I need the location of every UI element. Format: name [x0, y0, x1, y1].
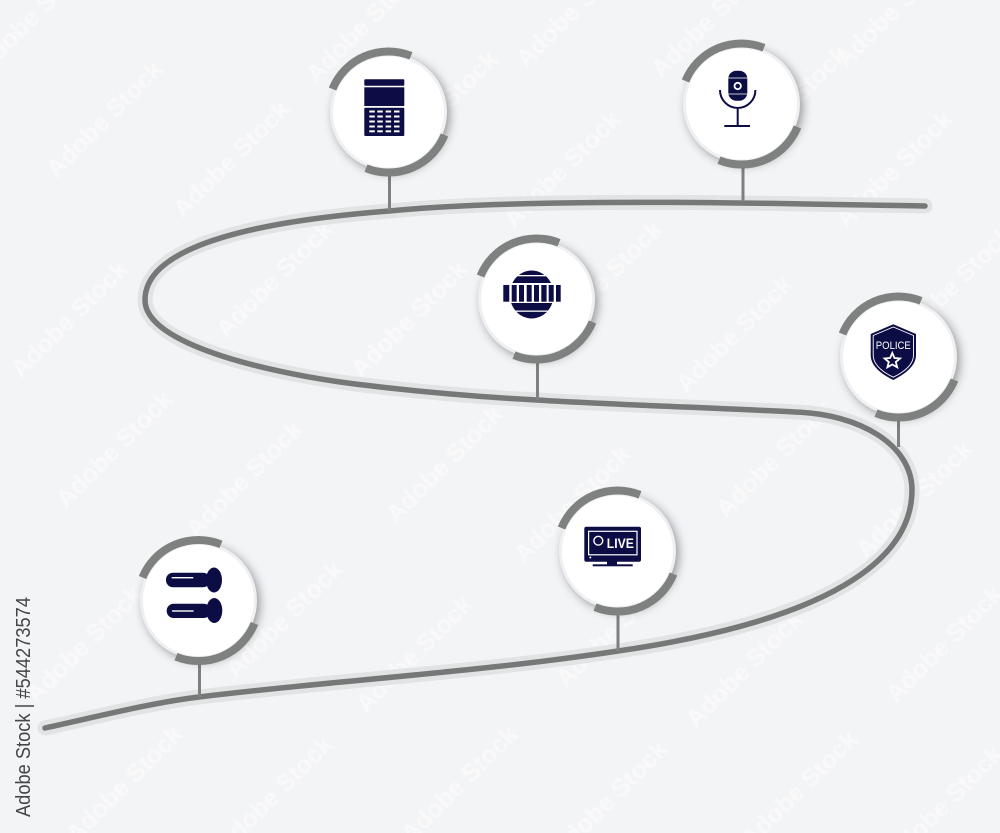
watermark pattern: Adobe Stock	[680, 605, 808, 733]
watermark pattern: Adobe Stock	[550, 565, 678, 693]
watermark pattern: Adobe Stock	[830, 105, 958, 233]
watermark pattern: Adobe Stock	[50, 385, 178, 513]
watermark pattern: Adobe Stock	[20, 580, 148, 708]
watermark pattern: Adobe Stock	[725, 40, 853, 168]
marker: police badge	[840, 296, 956, 418]
icon: microphone	[720, 71, 755, 126]
watermark pattern: Adobe Stock	[350, 590, 478, 718]
watermark pattern: Adobe Stock	[508, 440, 636, 568]
icon: calculator	[364, 79, 404, 136]
watermark pattern: Adobe Stock	[375, 45, 503, 173]
watermark pattern: Adobe Stock	[5, 255, 133, 383]
watermark pattern: Adobe Stock	[167, 95, 295, 223]
watermark pattern: Adobe Stock	[540, 215, 668, 343]
icon: live television: LIVE	[607, 535, 634, 551]
icon: police shield: POLICE	[876, 340, 911, 352]
watermark pattern: Adobe Stock	[670, 270, 798, 398]
marker: flashlights	[140, 540, 256, 661]
watermark pattern: Adobe Stock	[380, 400, 508, 528]
icon: barred disc	[503, 270, 561, 318]
watermark pattern: Adobe Stock	[345, 255, 473, 383]
marker: fence disc	[478, 238, 594, 360]
stem connectors	[200, 163, 898, 697]
marker: live tv	[560, 490, 676, 612]
winding road timeline	[45, 202, 925, 728]
watermark pattern: Adobe Stock	[180, 415, 308, 543]
marker: microphone	[684, 43, 800, 165]
vertical credit text: Adobe Stock | #544273574	[13, 597, 35, 817]
icon: flashlights	[166, 568, 222, 623]
watermark pattern: Adobe Stock	[710, 395, 838, 523]
watermark pattern: Adobe Stock	[40, 55, 168, 183]
watermark pattern: Adobe Stock	[850, 435, 978, 563]
watermark pattern: Adobe Stock	[220, 555, 348, 683]
watermark pattern: Adobe Stock	[210, 215, 338, 343]
marker: calculator	[330, 51, 446, 173]
watermark pattern: Adobe Stock	[498, 105, 626, 233]
